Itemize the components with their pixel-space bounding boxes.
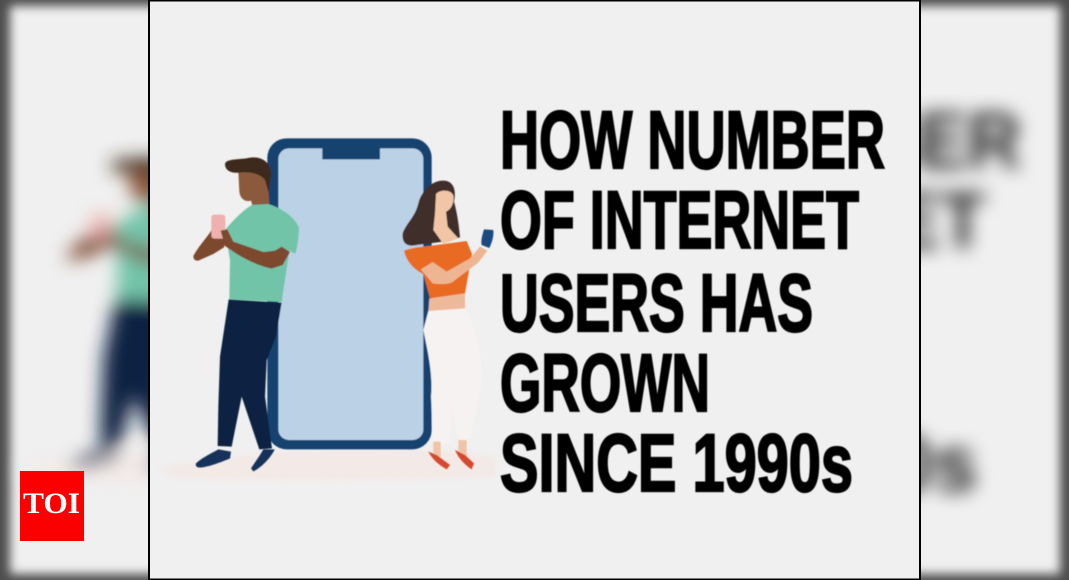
- illustration: two people leaning on a giant smartphone: [158, 138, 497, 481]
- icon: giant smartphone: [267, 138, 432, 449]
- title: SINCE 1990s: [500, 418, 853, 509]
- logo: TOI badge: TOI: [23, 487, 80, 520]
- main panel: [149, 0, 920, 580]
- logo: TOI badge: [20, 471, 84, 541]
- ground shadow: [158, 449, 497, 481]
- figure: woman with phone: [403, 181, 493, 469]
- figure: man with phone: [193, 157, 299, 471]
- illustration figures and phone: [193, 138, 493, 471]
- title: HOW NUMBER: [500, 95, 885, 186]
- title: OF INTERNET: [500, 175, 859, 266]
- title: GROWN: [500, 338, 710, 429]
- title: USERS HAS: [500, 258, 813, 349]
- title: [500, 95, 885, 509]
